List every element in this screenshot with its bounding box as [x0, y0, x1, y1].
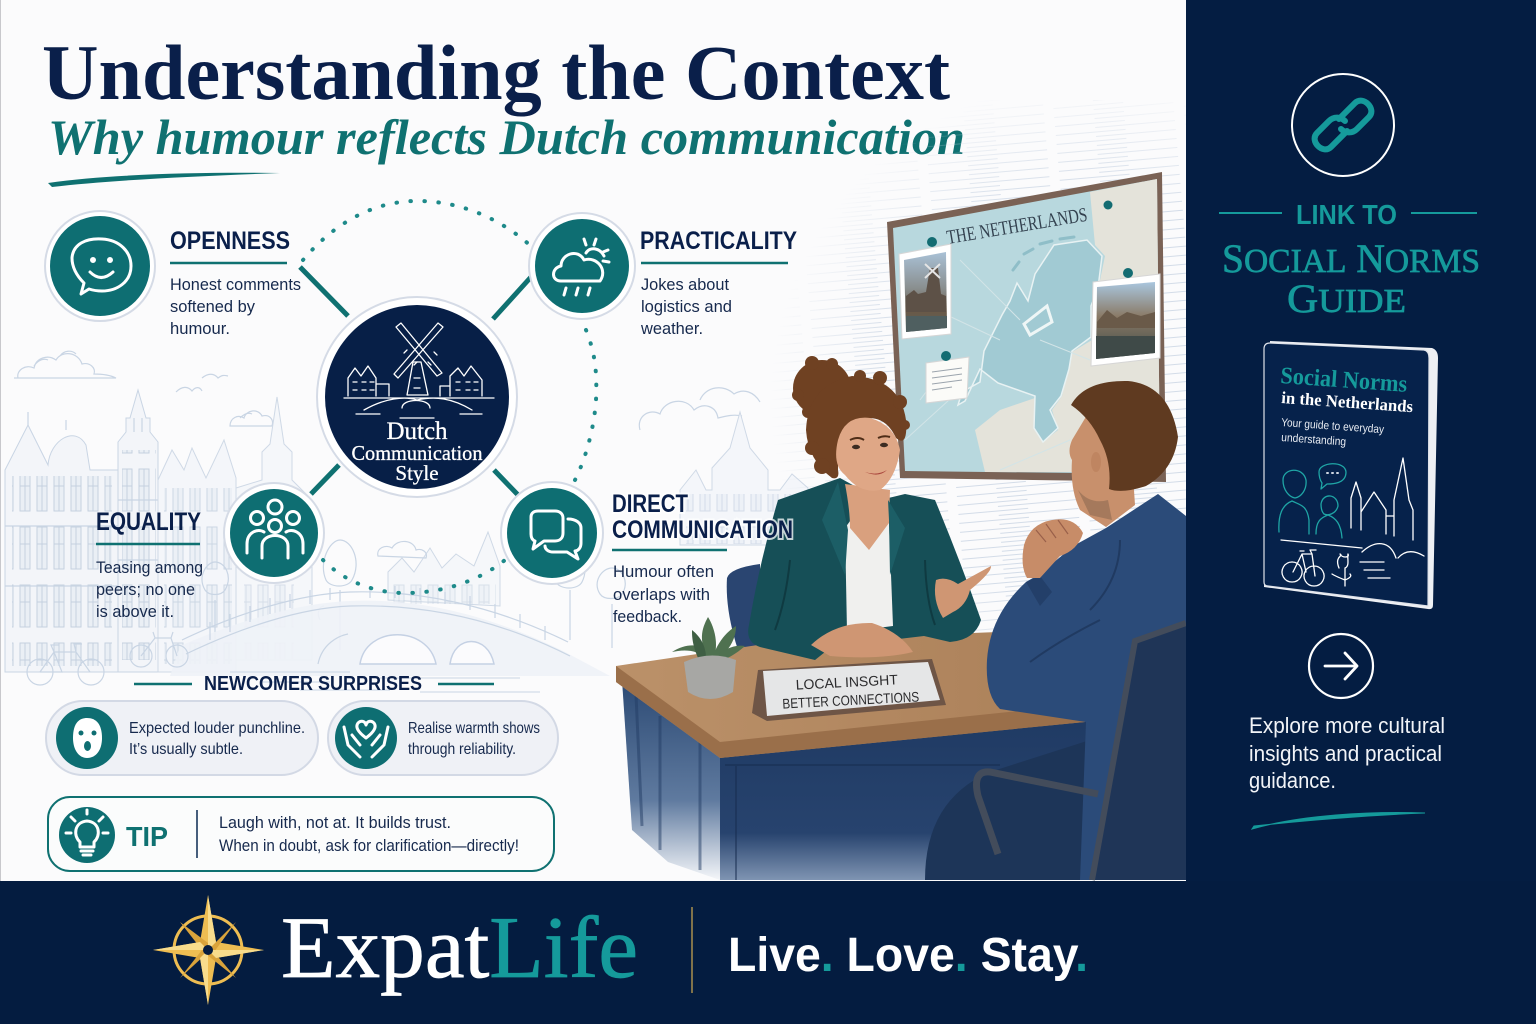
icon: light bulb	[66, 810, 108, 855]
pill: expected louder punchline: Expected louder punchline.	[129, 720, 305, 737]
book title: Your guide to everyday	[1281, 417, 1385, 436]
central hub: Dutch Communication Style	[317, 297, 517, 497]
page background	[0, 0, 1186, 881]
hub label: Communication	[352, 441, 483, 465]
pinned photo left	[899, 244, 951, 339]
Openness text: softened by	[170, 297, 255, 316]
name plate: LOCAL INSGHT	[795, 671, 899, 693]
icon: smiling speech bubble	[72, 239, 131, 294]
Direct Communication heading	[612, 490, 793, 544]
pill: expected louder punchline: It’s usually subtle.	[129, 741, 243, 758]
hub label	[352, 418, 483, 485]
wall hatching	[792, 103, 1186, 631]
tip box	[48, 797, 554, 871]
name plate	[752, 659, 946, 721]
Practicality text: weather.	[640, 319, 703, 338]
Openness text: humour.	[170, 319, 230, 338]
Equality text: Teasing among	[96, 558, 203, 577]
Direct Communication text: overlaps with	[613, 585, 710, 604]
icon: windmill and canal	[344, 323, 494, 418]
icon: surprised face	[73, 718, 102, 758]
Direct Communication heading: DIRECT	[612, 490, 688, 518]
Practicality heading: PRACTICALITY	[640, 227, 797, 255]
icon: chain link	[1292, 74, 1394, 176]
pill: expected louder punchline	[46, 701, 318, 775]
explore text: guidance.	[1249, 768, 1336, 793]
Equality text: is above it.	[96, 602, 174, 621]
Openness text	[170, 275, 301, 338]
explore text: insights and practical	[1249, 741, 1442, 766]
node: Practicality	[529, 213, 797, 338]
icon: cloud, sun and rain	[554, 239, 609, 295]
desk	[616, 632, 1090, 880]
map heading: THE NETHERLANDS	[945, 204, 1089, 249]
book title: understanding	[1281, 432, 1346, 449]
side panel	[1186, 0, 1536, 881]
left facades	[5, 425, 118, 672]
node: Equality	[96, 483, 324, 621]
icon: group of people	[247, 500, 303, 558]
potted plant	[672, 617, 745, 699]
title: Understanding the Context	[42, 29, 950, 116]
pill: warmth through reliability: Realise warmth shows	[408, 720, 540, 737]
node: Openness	[45, 211, 301, 338]
Practicality text	[640, 275, 732, 338]
tip box: Laugh with, not at. It builds trust.	[219, 813, 451, 832]
link to label: LINK TO	[1296, 199, 1397, 230]
guide title	[1222, 236, 1480, 321]
map board	[887, 172, 1166, 482]
map pins	[927, 200, 1133, 361]
Openness text: Honest comments	[170, 275, 301, 294]
Direct Communication heading: COMMUNICATION	[612, 516, 793, 544]
tagline: Live. Love. Stay.	[728, 929, 1088, 982]
icon: compass rose	[153, 895, 264, 1005]
woman	[748, 356, 991, 660]
node: Direct Communication	[501, 482, 793, 626]
guide title: GUIDE	[1287, 276, 1406, 321]
background sketch: Dutch city and canal	[5, 351, 808, 692]
pill: warmth through reliability	[328, 701, 558, 775]
clouds and birds	[14, 351, 116, 378]
subtitle: Why humour reflects Dutch communication	[48, 109, 965, 165]
bicycles	[27, 632, 188, 685]
icon: arrow circle	[1309, 634, 1373, 698]
Practicality text: Jokes about	[641, 275, 729, 294]
man's chair	[976, 623, 1186, 880]
icon: heart in hands	[344, 721, 388, 757]
pill: warmth through reliability: through reliability.	[408, 741, 516, 758]
water lines	[230, 672, 540, 692]
connector lines	[300, 267, 531, 496]
book art: city and canal	[1281, 458, 1424, 586]
pinned note	[926, 357, 969, 403]
illustration: office conversation	[616, 100, 1186, 880]
book title	[1280, 363, 1414, 449]
Equality text	[96, 558, 203, 621]
Equality heading: EQUALITY	[96, 508, 201, 536]
Equality text: peers; no one	[96, 580, 195, 599]
newcomer surprises heading: NEWCOMER SURPRISES	[204, 673, 422, 695]
footer bar	[0, 881, 1536, 1024]
hub label: Style	[395, 461, 439, 485]
trees	[202, 540, 625, 650]
explore text	[1249, 713, 1445, 793]
Direct Communication text	[613, 562, 714, 626]
icon: two speech bubbles	[531, 511, 581, 559]
tip box: When in doubt, ask for clarification—directly!	[219, 836, 519, 855]
book title: Social Norms	[1280, 363, 1408, 398]
Practicality text: logistics and	[641, 297, 732, 316]
man's head	[1070, 410, 1135, 527]
canal bridge	[170, 586, 610, 676]
Openness heading: OPENNESS	[170, 227, 290, 255]
central faint skyline	[388, 532, 500, 606]
right faint skyline	[639, 388, 760, 430]
woman's hair and bun	[792, 356, 910, 478]
woman's hands	[811, 623, 913, 657]
dotted ring	[303, 201, 596, 593]
explore text: Explore more cultural	[1249, 713, 1445, 738]
side panel swoosh	[1252, 813, 1425, 829]
hub label: Dutch	[386, 418, 448, 445]
Direct Communication text: feedback.	[613, 607, 682, 626]
pinned photo right	[1091, 274, 1160, 366]
guide title: SOCIAL NORMS	[1222, 236, 1480, 281]
guide book	[1264, 341, 1438, 609]
man's clasped hands	[1023, 519, 1083, 578]
tip box: TIP	[126, 821, 168, 852]
book art: people talking	[1279, 464, 1346, 538]
book title: in the Netherlands	[1281, 388, 1414, 416]
woman's chair	[727, 564, 760, 650]
man	[925, 381, 1186, 880]
subtitle swoosh	[48, 173, 280, 187]
logo wordmark: ExpatLife	[281, 900, 638, 997]
name plate: BETTER CONNECTIONS	[782, 688, 920, 712]
Direct Communication text: Humour often	[613, 562, 714, 581]
